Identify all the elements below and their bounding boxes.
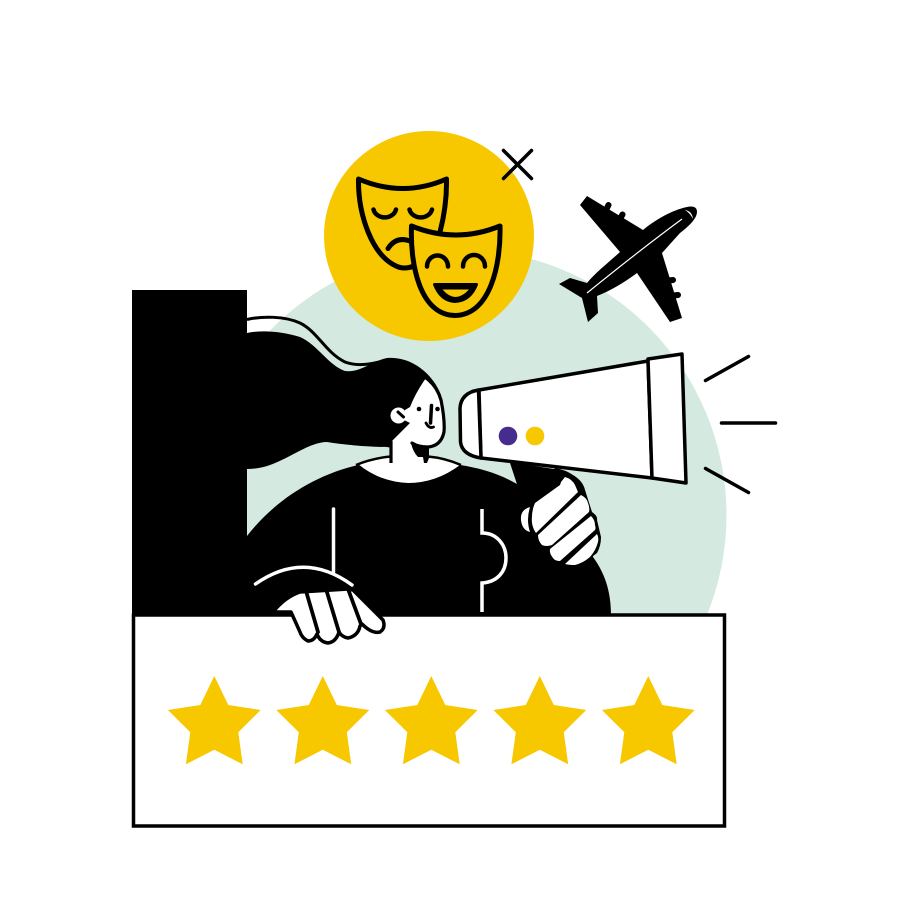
megaphone cap (460, 390, 481, 458)
right hand on megaphone (521, 468, 601, 567)
body (247, 463, 611, 615)
megaphone dots (499, 427, 517, 445)
happy mask (411, 226, 500, 316)
ear (390, 408, 406, 424)
stars (168, 676, 695, 764)
rating card (134, 615, 724, 826)
collar (358, 457, 460, 483)
shirt seam: left (332, 509, 335, 572)
hair outline strand (247, 317, 387, 365)
fingers (532, 477, 598, 565)
megaphone (460, 354, 686, 490)
icon: cross mark (504, 150, 532, 178)
shirt seam: arm arc (256, 567, 352, 585)
left hand over card (273, 589, 384, 643)
black rectangle (132, 290, 247, 616)
neck and face (356, 378, 461, 483)
hair (247, 331, 445, 469)
megaphone cone (479, 361, 652, 478)
megaphone bell (648, 354, 686, 483)
icon: theatre masks (358, 179, 500, 316)
megaphone grip (510, 462, 570, 490)
face features (417, 406, 440, 428)
icon: airplane (559, 196, 697, 322)
shirt seam: right pocket (482, 509, 506, 612)
yellow circle (324, 131, 534, 341)
background: mint circle (196, 250, 726, 780)
sad mask (358, 179, 447, 268)
sound rays (706, 356, 776, 492)
